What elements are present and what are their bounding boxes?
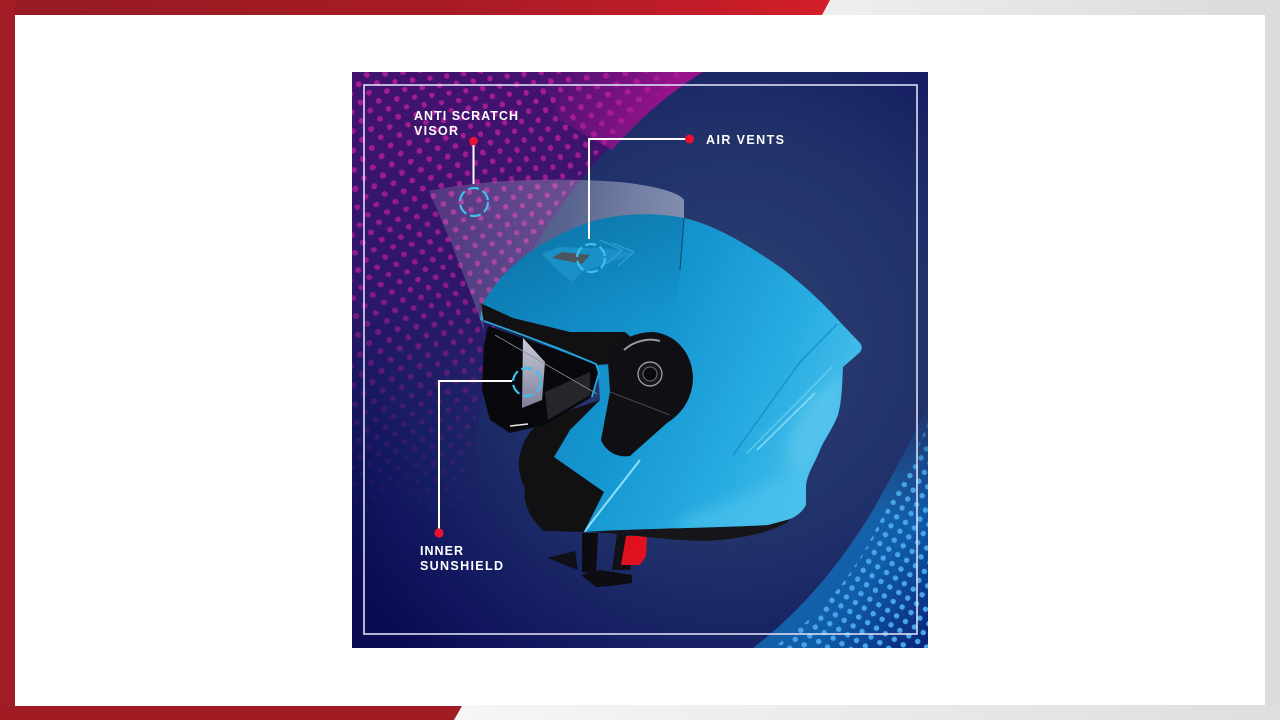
- clear outer visor: [429, 180, 684, 332]
- strap and buckle: [547, 533, 647, 587]
- inner frame: [364, 85, 917, 634]
- lower black rim: [590, 518, 792, 541]
- panel: helmet artwork: [340, 60, 928, 648]
- callout: anti scratch visor: [414, 109, 518, 216]
- blue halftone swoosh: [753, 403, 928, 648]
- shell: [480, 214, 862, 532]
- callout: air vents: AIR VENTS: [706, 133, 784, 147]
- purple halftone swoosh: [352, 72, 703, 504]
- callout: anti scratch visor: ANTI SCRATCH: [414, 109, 518, 123]
- panel background: [352, 72, 928, 648]
- callout: anti scratch visor: VISOR: [414, 124, 458, 138]
- helmet: [429, 180, 862, 587]
- callout: inner sunshield: [420, 368, 541, 573]
- sun shield and visor: [482, 321, 599, 433]
- callout: air vents: [577, 133, 784, 272]
- callout: inner sunshield: SUNSHIELD: [420, 559, 503, 573]
- shell shade under visor: [512, 214, 684, 282]
- rear shell highlights: [584, 324, 845, 532]
- neck roll and cheek pad: [518, 400, 604, 532]
- callout: inner sunshield: INNER: [420, 544, 463, 558]
- air vent: [542, 240, 635, 282]
- side pod: [601, 332, 693, 456]
- brow band: [480, 303, 640, 365]
